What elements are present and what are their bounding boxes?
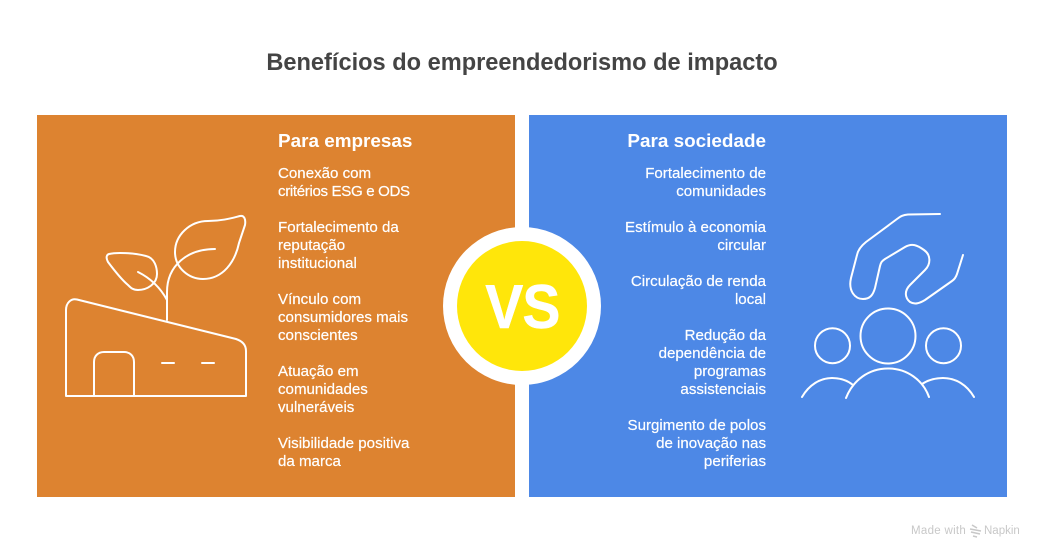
text block: sociedade benefit 5 xyxy=(628,417,766,470)
text block: empresas benefit 4: comunidades xyxy=(278,381,368,398)
text block: sociedade benefit 4: Redução da xyxy=(685,327,766,344)
icon: hand over people xyxy=(801,213,975,399)
panel: para empresas xyxy=(37,115,515,497)
watermark: made with napkin xyxy=(911,524,1020,538)
heading: para sociedade: Para sociedade xyxy=(627,131,766,152)
text block: empresas benefit 5: Visibilidade positiva xyxy=(278,435,409,452)
text block: empresas benefit 4: Atuação em xyxy=(278,363,359,380)
text block: sociedade benefit 5: periferias xyxy=(704,453,766,470)
text block: empresas benefit 2: Fortalecimento da xyxy=(278,219,399,236)
panel: para sociedade xyxy=(529,115,1007,497)
text block: empresas benefit 2: institucional xyxy=(278,255,357,272)
text block: sociedade benefit 3: Circulação de renda xyxy=(631,273,766,290)
text block: empresas benefit 3: conscientes xyxy=(278,327,358,344)
text block: sociedade benefit 4: assistenciais xyxy=(680,381,766,398)
text block: sociedade benefit 2: circular xyxy=(717,237,766,254)
text block: empresas benefit 2: reputação xyxy=(278,237,345,254)
text block: empresas benefit 3 xyxy=(278,291,408,344)
text block: empresas benefit 2 xyxy=(278,219,399,272)
text block: sociedade benefit 4 xyxy=(659,327,766,398)
text block: sociedade benefit 1: Fortalecimento de xyxy=(645,165,766,182)
icon: napkin logo xyxy=(970,524,981,538)
text block: sociedade benefit 1 xyxy=(645,165,766,200)
text block: empresas benefit 5: da marca xyxy=(278,453,341,470)
text block: sociedade benefit 5: Surgimento de polos xyxy=(628,417,766,434)
text block: empresas benefit 1 xyxy=(278,165,410,200)
text block: empresas benefit 3: consumidores mais xyxy=(278,309,408,326)
text block: empresas benefit 5 xyxy=(278,435,410,470)
text block: sociedade benefit 4: dependência de xyxy=(659,345,766,362)
text block: empresas benefit 4 xyxy=(278,363,368,416)
vs circle: VS xyxy=(485,273,559,342)
text block: sociedade benefit 4: programas xyxy=(694,363,766,380)
heading: para empresas: Para empresas xyxy=(278,131,412,152)
text block: sociedade benefit 3 xyxy=(631,273,766,308)
text block: empresas benefit 1: critérios ESG e ODS xyxy=(278,183,410,200)
watermark: made with napkin: Napkin xyxy=(984,525,1020,537)
text block: sociedade benefit 2 xyxy=(625,219,766,254)
text block: sociedade benefit 1: comunidades xyxy=(676,183,766,200)
text block: sociedade benefit 5: de inovação nas xyxy=(656,435,766,452)
vs badge xyxy=(443,227,601,385)
watermark: made with napkin: Made with xyxy=(911,525,966,537)
text block: sociedade benefit 3: local xyxy=(735,291,766,308)
text block: empresas benefit 4: vulneráveis xyxy=(278,399,354,416)
text block: empresas benefit 1: Conexão com xyxy=(278,165,371,182)
icon: building with sprout xyxy=(65,214,247,397)
title: Benefícios do empreendedorismo de impacto xyxy=(266,50,778,76)
vs circle xyxy=(457,241,587,371)
text block: empresas benefit 3: Vínculo com xyxy=(278,291,361,308)
text block: sociedade benefit 2: Estímulo à economia xyxy=(625,219,766,236)
